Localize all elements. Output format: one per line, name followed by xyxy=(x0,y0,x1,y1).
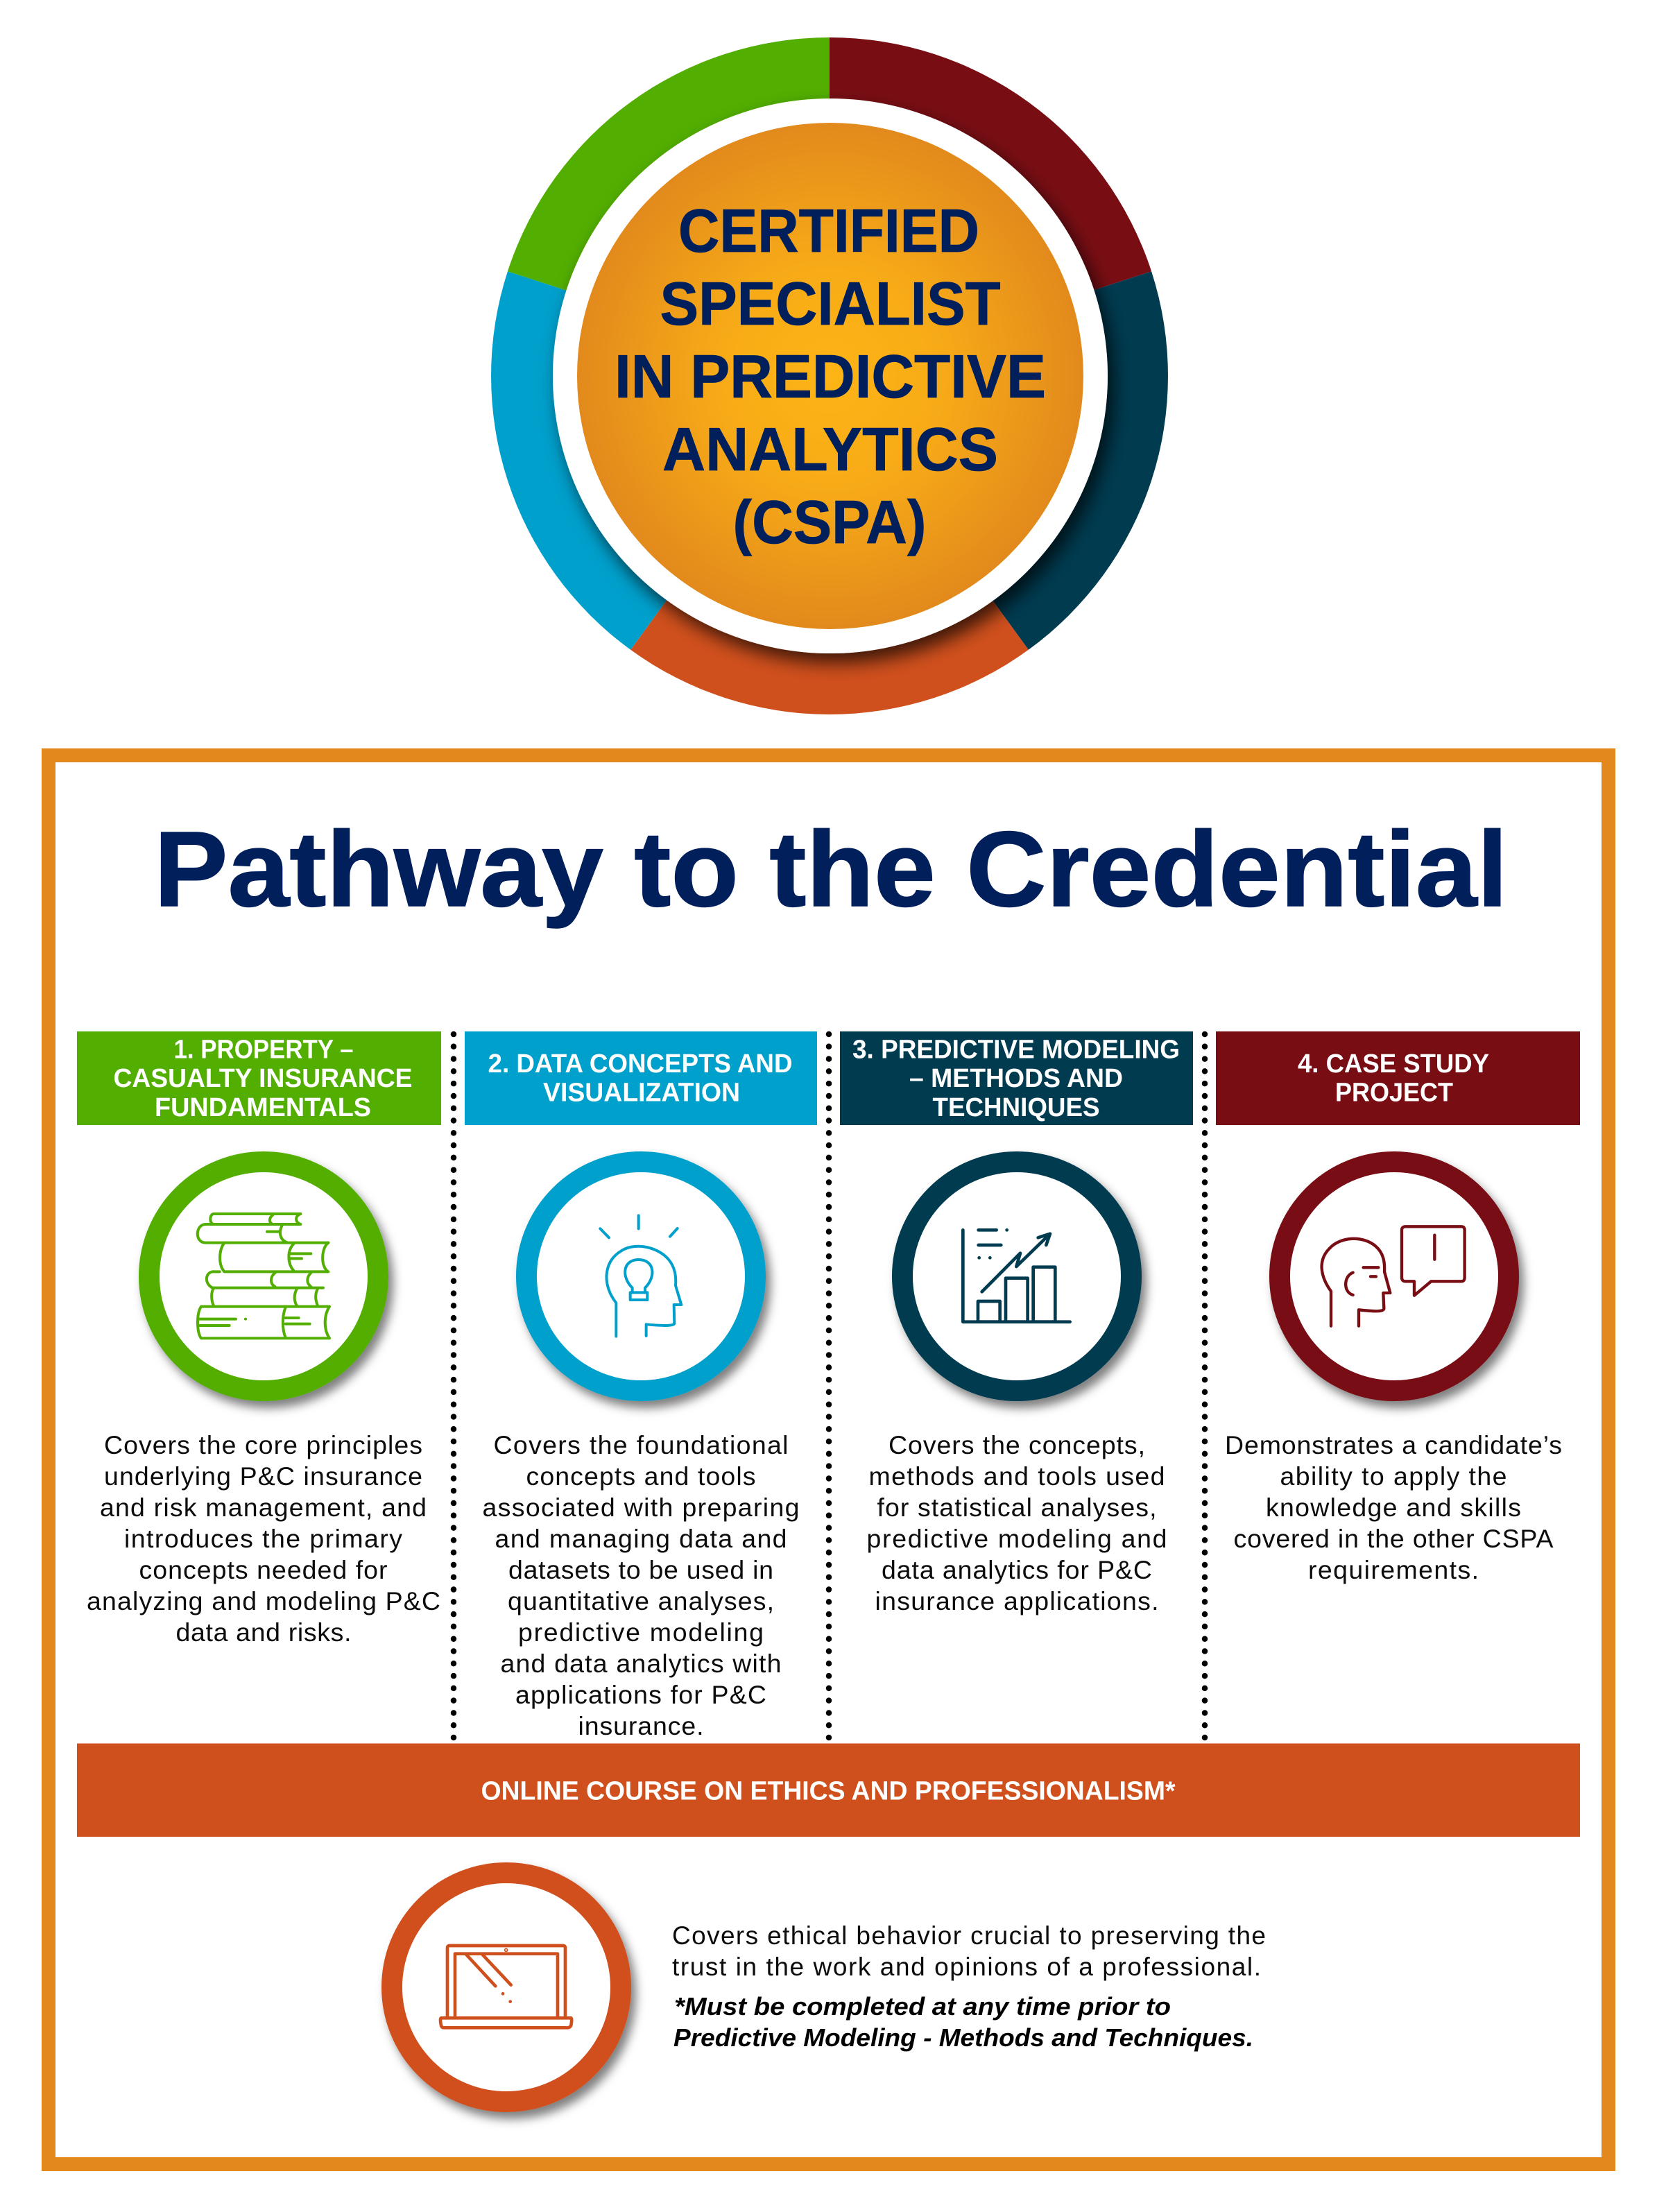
column dividers xyxy=(454,1034,1205,1740)
ethics course description: trust in the work and opinions of a professional. xyxy=(672,1953,1261,1981)
description 2 xyxy=(483,1430,799,1740)
description 1: and risk management, and xyxy=(100,1493,427,1522)
ethics course description: Covers ethical behavior crucial to preserving the xyxy=(672,1921,1266,1950)
ethics course banner: ONLINE COURSE ON ETHICS AND PROFESSIONALISM* xyxy=(481,1777,1176,1806)
description 2: predictive modeling xyxy=(518,1618,764,1647)
ethics course description xyxy=(672,1921,1266,1981)
header bar 3: 3. PREDICTIVE MODELING xyxy=(852,1035,1180,1064)
header bar 3: – METHODS AND xyxy=(909,1064,1123,1093)
header bar 4 xyxy=(1216,1031,1580,1125)
description 2: Covers the foundational xyxy=(494,1430,788,1459)
header bar 4: 4. CASE STUDY xyxy=(1298,1049,1489,1079)
emblem title xyxy=(615,196,1046,556)
description 1: introduces the primary xyxy=(124,1524,402,1553)
icon circle 5: laptop xyxy=(392,1873,621,2102)
ring segment: orange xyxy=(630,376,1029,714)
description 1 xyxy=(87,1430,440,1647)
description 2: insurance. xyxy=(578,1711,703,1740)
description 2: and data analytics with xyxy=(501,1649,781,1678)
ring segment: green xyxy=(508,37,830,376)
description 4: ability to apply the xyxy=(1280,1461,1506,1491)
header bar 2: 2. DATA CONCEPTS AND xyxy=(488,1049,792,1079)
description 3: Covers the concepts, xyxy=(888,1430,1145,1459)
column 3: Predictive Modeling - Methods and Techniques xyxy=(840,1031,1193,1615)
description 1: data and risks. xyxy=(176,1618,351,1647)
description 4: requirements. xyxy=(1308,1555,1479,1584)
emblem title: ANALYTICS xyxy=(662,415,998,483)
header bar 1: FUNDAMENTALS xyxy=(155,1093,371,1122)
header bar 2 xyxy=(465,1031,817,1125)
footnote: Predictive Modeling - Methods and Techniques. xyxy=(673,2023,1253,2052)
description 2: applications for P&C xyxy=(515,1680,766,1709)
description 1: concepts needed for xyxy=(139,1555,387,1584)
emblem title: (CSPA) xyxy=(732,488,927,556)
header bar 2: VISUALIZATION xyxy=(543,1078,740,1107)
description 3: predictive modeling and xyxy=(867,1524,1167,1553)
description 3: for statistical analyses, xyxy=(877,1493,1157,1522)
description 2: associated with preparing xyxy=(483,1493,799,1522)
description 2: and managing data and xyxy=(495,1524,787,1553)
description 3 xyxy=(867,1430,1167,1615)
emblem title: CERTIFIED xyxy=(678,196,979,265)
description 4 xyxy=(1225,1430,1562,1584)
description 1: underlying P&C insurance xyxy=(104,1461,422,1491)
header bar 1 xyxy=(77,1031,441,1125)
description 2: concepts and tools xyxy=(526,1461,756,1491)
description 2: quantitative analyses, xyxy=(508,1586,774,1615)
icon circle 2: head with light bulb xyxy=(526,1162,755,1391)
column 2: Data Concepts and Visualization xyxy=(465,1031,817,1740)
panel: pathway frame xyxy=(49,755,1608,2164)
description 3: data analytics for P&C xyxy=(882,1555,1152,1584)
heading: Pathway to the Credential: Pathway to the Credential xyxy=(154,809,1508,929)
description 4: knowledge and skills xyxy=(1266,1493,1521,1522)
footnote: *Must be completed at any time prior to xyxy=(674,1992,1171,2021)
description 1: Covers the core principles xyxy=(104,1430,422,1459)
description 2: datasets to be used in xyxy=(508,1555,773,1584)
header bar 3: TECHNIQUES xyxy=(932,1093,1100,1122)
column 1: Property-Casualty Insurance Fundamentals xyxy=(77,1031,441,1647)
ring segment: blue xyxy=(491,271,830,650)
header bar 1: CASUALTY INSURANCE xyxy=(114,1064,412,1093)
gold centre disc xyxy=(577,123,1083,629)
icon circle 3: growth bar chart xyxy=(902,1162,1131,1391)
header bar 4: PROJECT xyxy=(1335,1078,1453,1107)
ring segment: maroon xyxy=(830,37,1151,376)
icon circle 1: books xyxy=(149,1162,378,1391)
white inner disc xyxy=(553,98,1108,653)
ethics course banner xyxy=(77,1744,1580,1837)
header bar 3 xyxy=(840,1031,1193,1125)
ring segment: dark teal xyxy=(830,271,1168,650)
description 1: analyzing and modeling P&C xyxy=(87,1586,440,1615)
description 3: methods and tools used xyxy=(868,1461,1165,1491)
emblem title: SPECIALIST xyxy=(660,269,1000,338)
description 3: insurance applications. xyxy=(875,1586,1158,1615)
icon circle 4: head with speech bubble xyxy=(1280,1162,1509,1391)
column 4: Case Study Project xyxy=(1216,1031,1580,1584)
header bar 1: 1. PROPERTY – xyxy=(173,1035,354,1064)
emblem: CSPA donut badge xyxy=(491,37,1168,714)
emblem title: IN PREDICTIVE xyxy=(615,342,1046,411)
description 4: Demonstrates a candidate’s xyxy=(1225,1430,1562,1459)
footnote xyxy=(673,1992,1253,2052)
description 4: covered in the other CSPA xyxy=(1233,1524,1554,1553)
